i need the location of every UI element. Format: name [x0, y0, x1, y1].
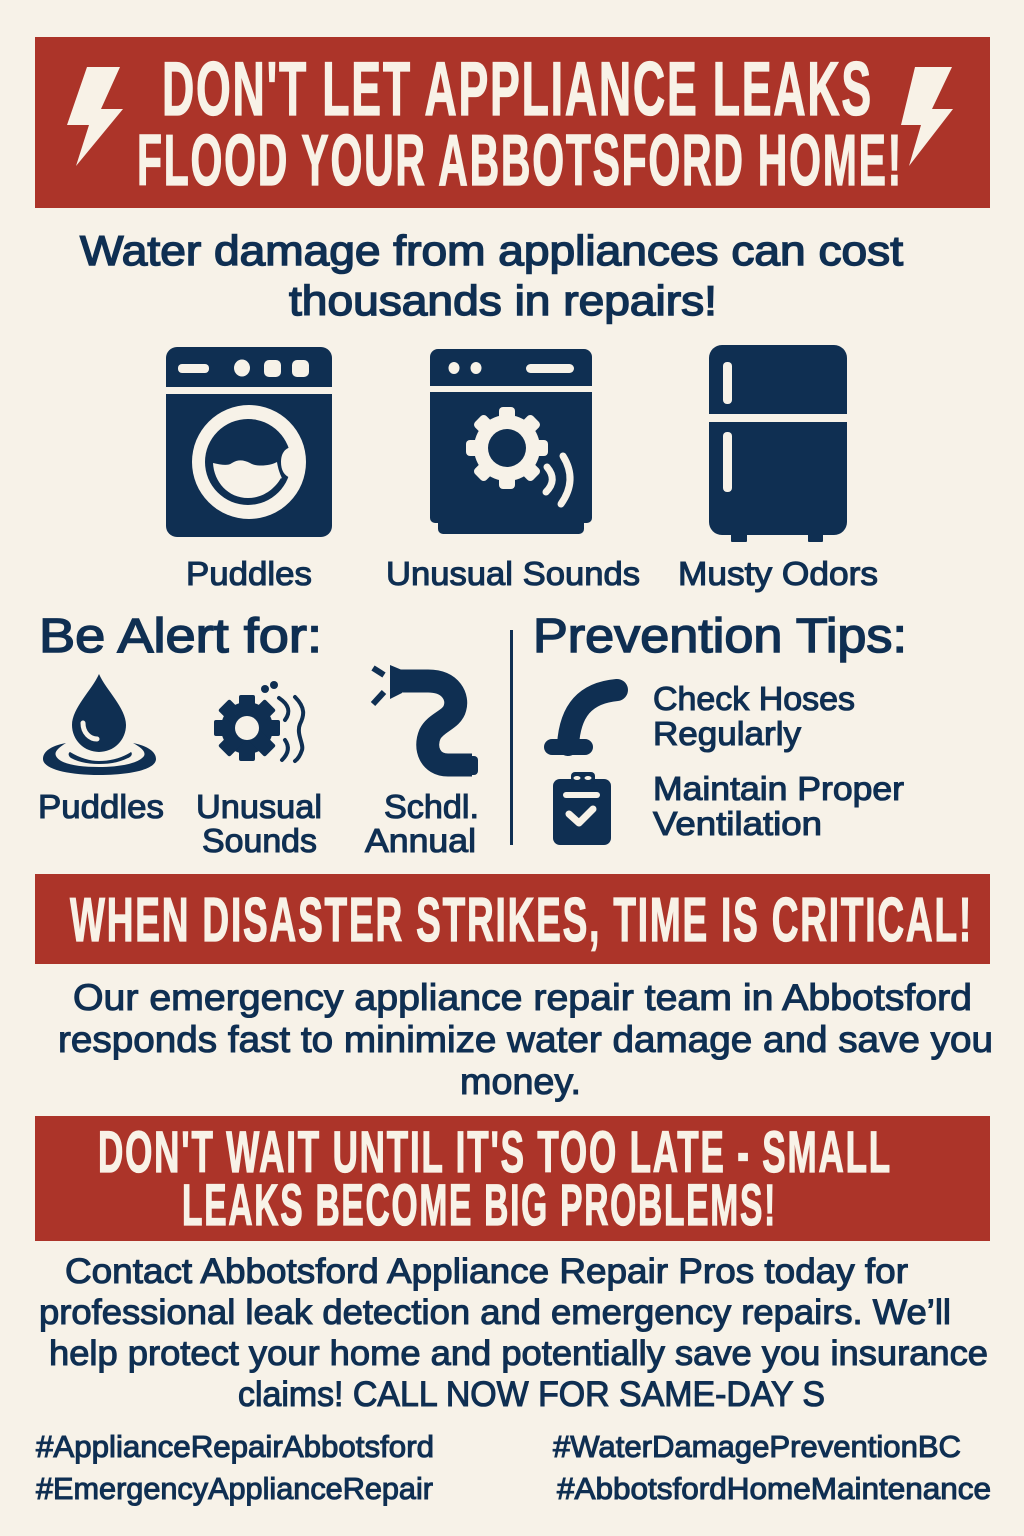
hashtags — [36, 1429, 991, 1506]
tip: check hoses: Regularly — [653, 715, 802, 752]
panel: prevention tips — [533, 610, 907, 845]
icon: dishwasher with gear — [430, 349, 592, 534]
alert labels: Unusual — [196, 788, 322, 825]
heading: be alert for: Be Alert for: — [39, 610, 322, 663]
alert labels: Puddles — [38, 788, 164, 825]
panel: be alert for — [38, 610, 479, 859]
subheading: thousands in repairs! — [289, 277, 717, 324]
text block: emergency response: responds fast to minimize water damage and save you — [58, 1019, 993, 1060]
icon: gear with sound waves — [214, 681, 303, 761]
text block: emergency response: money. — [460, 1061, 581, 1102]
alert labels: Schdl. — [384, 788, 479, 825]
subheading — [80, 227, 903, 324]
text block: emergency response: Our emergency appliance repair team in Abbotsford — [73, 977, 972, 1018]
hashtags: #EmergencyApplianceRepair — [36, 1471, 433, 1506]
text block: emergency response — [58, 977, 993, 1102]
tip: check hoses — [653, 680, 855, 752]
hashtags: #WaterDamagePreventionBC — [553, 1429, 961, 1464]
tip: check hoses: Check Hoses — [653, 680, 855, 717]
appliance labels: Musty Odors — [678, 555, 878, 592]
tip: maintain ventilation: Maintain Proper — [653, 770, 904, 807]
icon: clipboard checklist — [553, 772, 611, 845]
panel: title banner — [35, 37, 990, 208]
icon: hose — [544, 690, 617, 755]
appliance labels: Unusual Sounds — [386, 555, 640, 592]
text block: call to action: professional leak detection and emergency repairs. We’ll — [39, 1293, 951, 1332]
text block: call to action: Contact Abbotsford Appliance Repair Pros today for — [65, 1252, 908, 1291]
icon: left lightning bolt — [67, 67, 123, 166]
title — [137, 47, 903, 201]
appliance labels — [186, 555, 878, 592]
panel: appliance warning signs — [166, 345, 878, 592]
icon: leaking hose — [373, 665, 478, 775]
tip: maintain ventilation: Ventilation — [653, 805, 822, 842]
alert labels: Annual — [365, 822, 476, 859]
icon: washing machine — [166, 347, 332, 537]
appliance labels: Puddles — [186, 555, 312, 592]
hashtags: #AbbotsfordHomeMaintenance — [557, 1471, 991, 1506]
subheading: Water damage from appliances can cost — [80, 227, 903, 274]
text block: call to action — [39, 1252, 988, 1414]
heading: prevention tips: Prevention Tips: — [533, 610, 907, 663]
panel: don't wait banner — [35, 1116, 990, 1241]
hashtags: #ApplianceRepairAbbotsford — [36, 1429, 434, 1464]
icon: water drop with ripple — [43, 674, 156, 775]
text block: call to action: claims! CALL NOW FOR SAME-DAY S — [238, 1375, 825, 1414]
alert labels: Sounds — [202, 822, 317, 859]
tip: maintain ventilation — [653, 770, 904, 842]
icon: right lightning bolt — [901, 67, 953, 166]
text block: call to action: help protect your home and potentially save you insurance — [49, 1334, 988, 1373]
icon: refrigerator — [709, 345, 847, 542]
alert labels — [38, 788, 479, 859]
